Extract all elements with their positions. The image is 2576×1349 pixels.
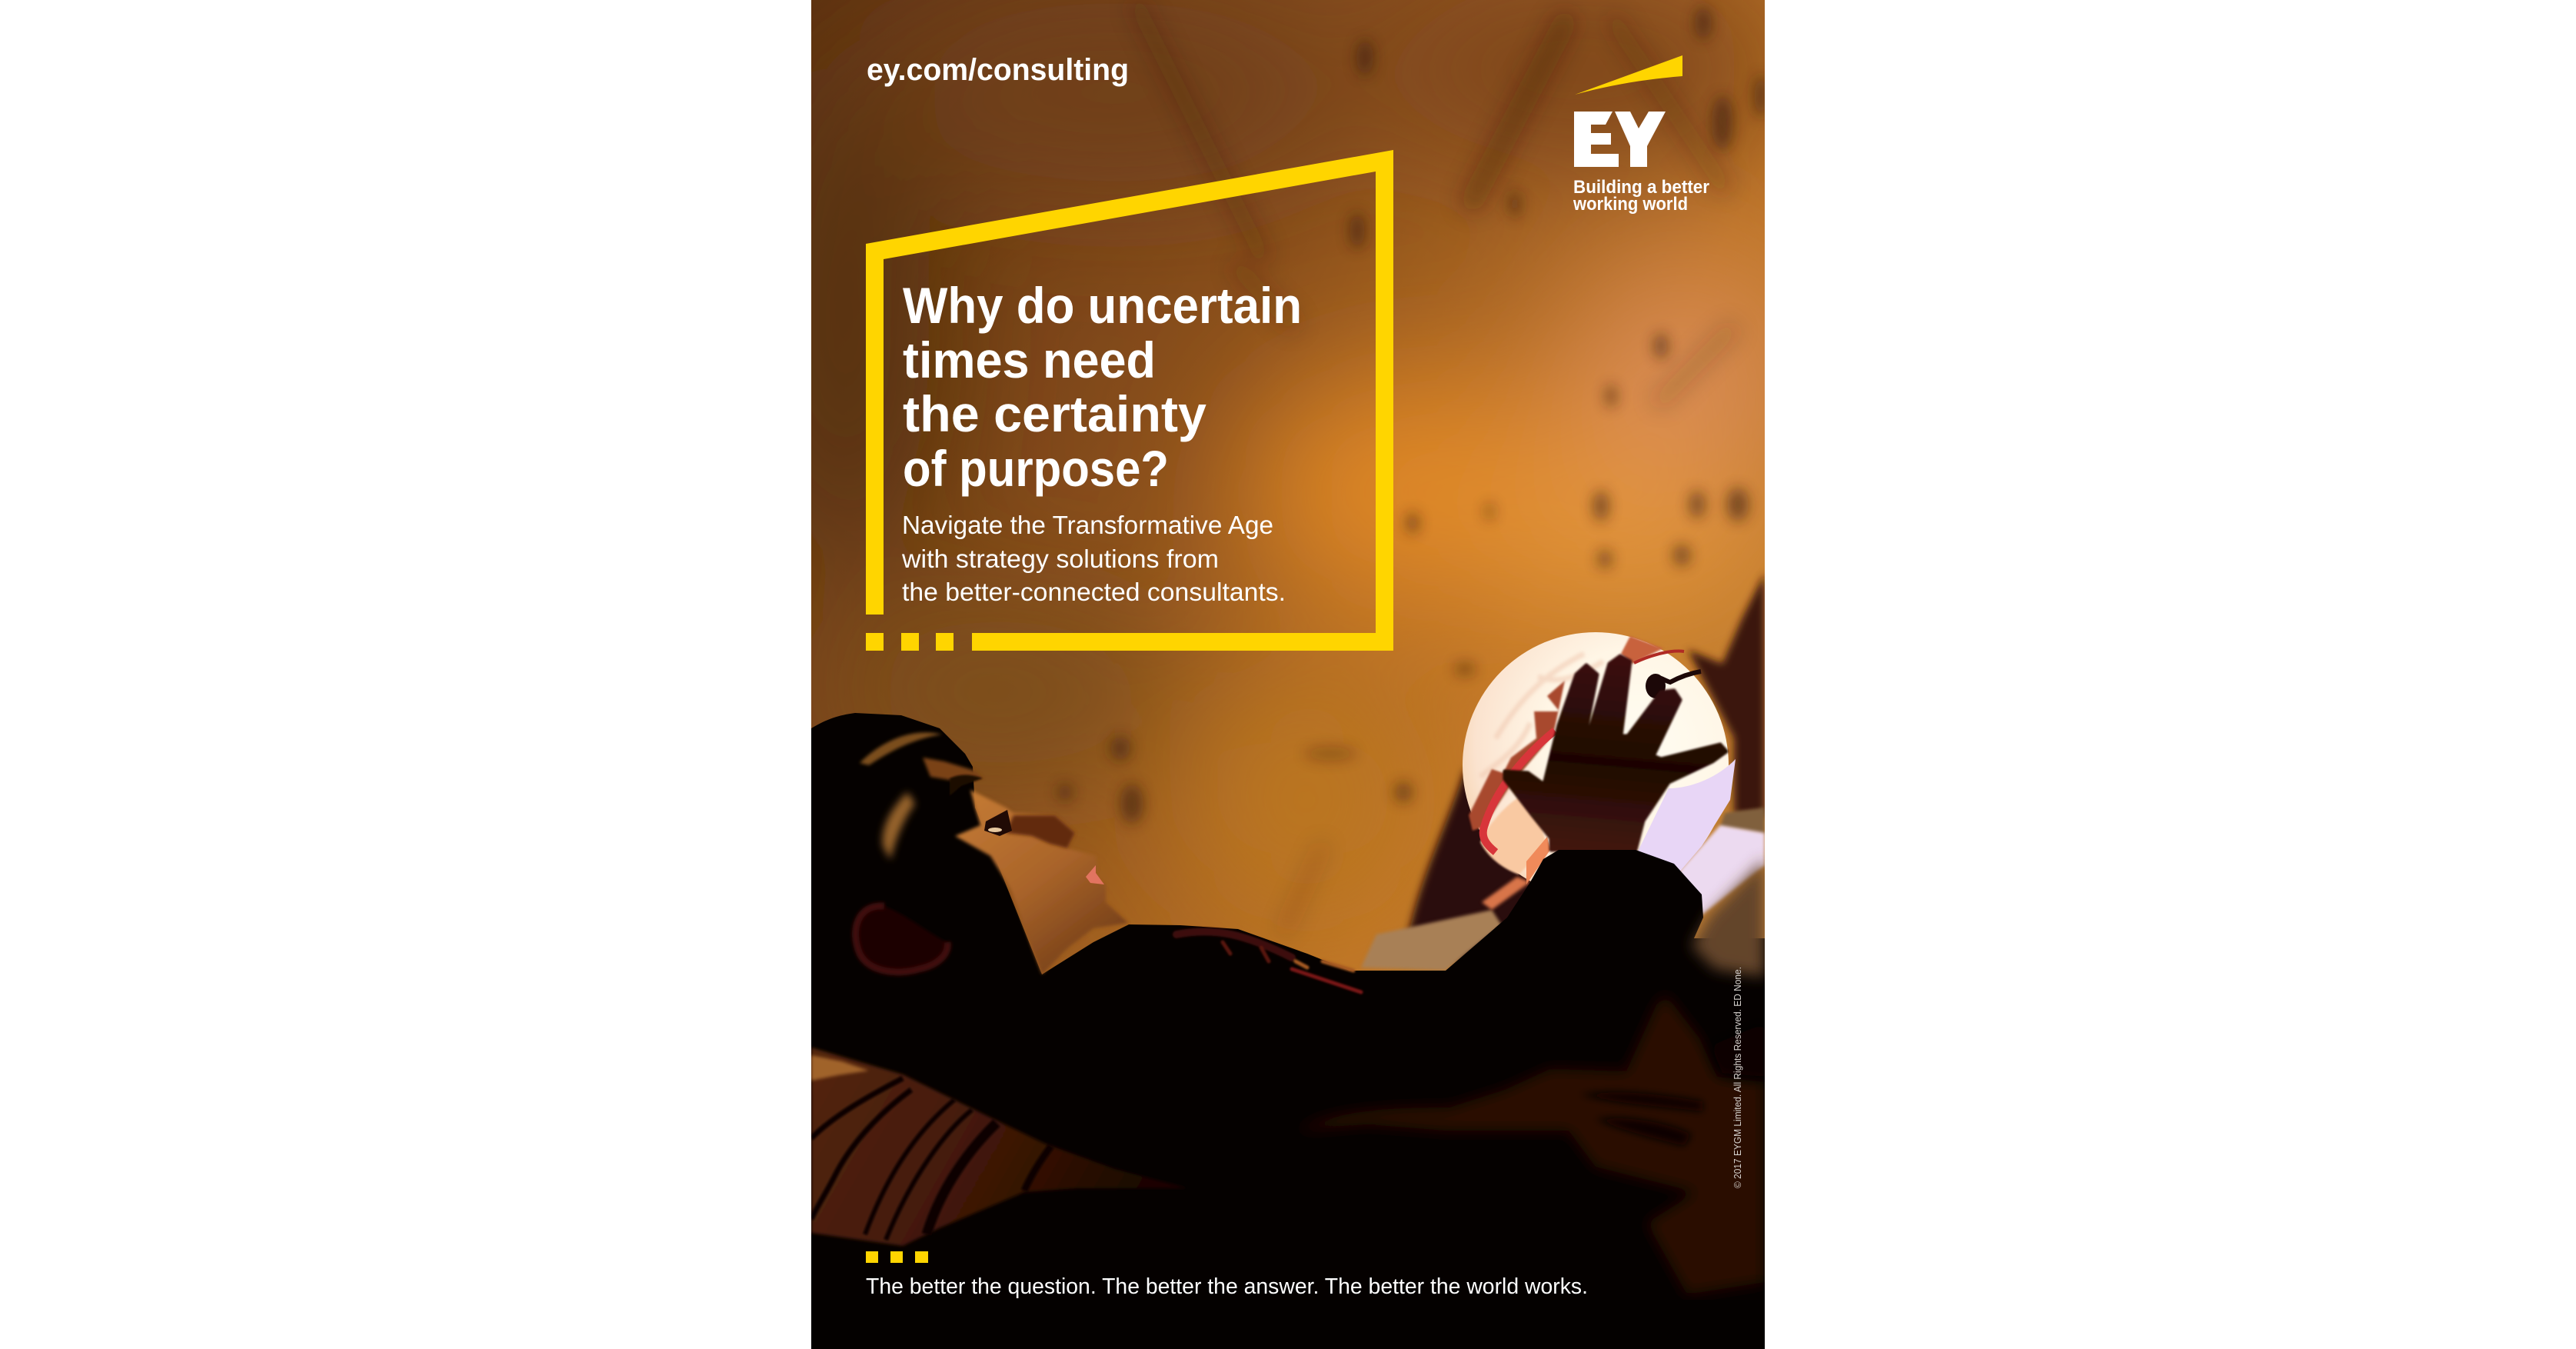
EY logo <box>1573 55 1709 215</box>
pale bedding <box>1679 808 1765 915</box>
boy: eye <box>984 810 1012 836</box>
shadow behind globe <box>1404 766 1530 963</box>
boy: ear <box>856 906 947 972</box>
logo tagline: working world <box>1573 194 1688 215</box>
globe: black switch and cord <box>1653 671 1701 682</box>
headline: the certainty <box>903 385 1206 442</box>
boy: plaid shirt flecks <box>1177 931 1361 992</box>
tan fabric at right edge <box>1692 859 1765 977</box>
cream sleeve <box>1361 910 1502 971</box>
subheading: the better-connected consultants. <box>902 578 1286 606</box>
globe: lavender stand <box>1638 759 1736 873</box>
globe: red strip <box>1483 731 1555 852</box>
boy: hair, shirt and dark foreground <box>811 713 1765 1349</box>
globe: base below strip <box>1480 792 1547 874</box>
logo letters <box>1574 112 1666 167</box>
warm glow by sleeve <box>1482 877 1530 910</box>
subheading: Navigate the Transformative Age <box>902 511 1273 539</box>
globe <box>1463 632 1736 898</box>
hand <box>1505 656 1726 850</box>
url text: ey.com/consulting <box>867 53 1129 87</box>
boy: eyebrow <box>950 774 983 796</box>
boy: forehead <box>923 758 983 781</box>
logo tagline: Building a better <box>1573 177 1709 198</box>
boy: nose shadow <box>1006 815 1075 848</box>
blanket <box>1298 994 1765 1294</box>
headline: Why do uncertain <box>903 277 1302 334</box>
yellow beam frame <box>866 150 1393 651</box>
wall: constellation marks <box>1057 6 1768 931</box>
boy: lips <box>1086 865 1104 884</box>
copyright note: © 2017 EYGM Limited. All Rights Reserved. ED None. <box>1732 967 1743 1188</box>
headline: times need <box>903 331 1156 388</box>
boy: hair highlight <box>860 732 942 765</box>
poster <box>811 0 1765 1349</box>
globe: castellated edge <box>1469 681 1565 831</box>
globe: clouds on left hemisphere <box>1480 654 1603 815</box>
boy: face <box>860 732 1128 974</box>
boy: temple highlight <box>883 792 915 860</box>
photo: boy with glowing globe <box>761 0 1799 1349</box>
tagline: The better the question. The better the answer. The better the world works. <box>866 1274 1588 1299</box>
bottom dashes <box>866 1251 928 1263</box>
frame dashes <box>866 633 954 651</box>
dark wall shadow on right <box>1688 573 1765 815</box>
pillow <box>811 1048 1188 1246</box>
subheading: with strategy solutions from <box>901 545 1219 573</box>
logo beam <box>1575 55 1682 95</box>
headline: of purpose? <box>903 440 1169 497</box>
